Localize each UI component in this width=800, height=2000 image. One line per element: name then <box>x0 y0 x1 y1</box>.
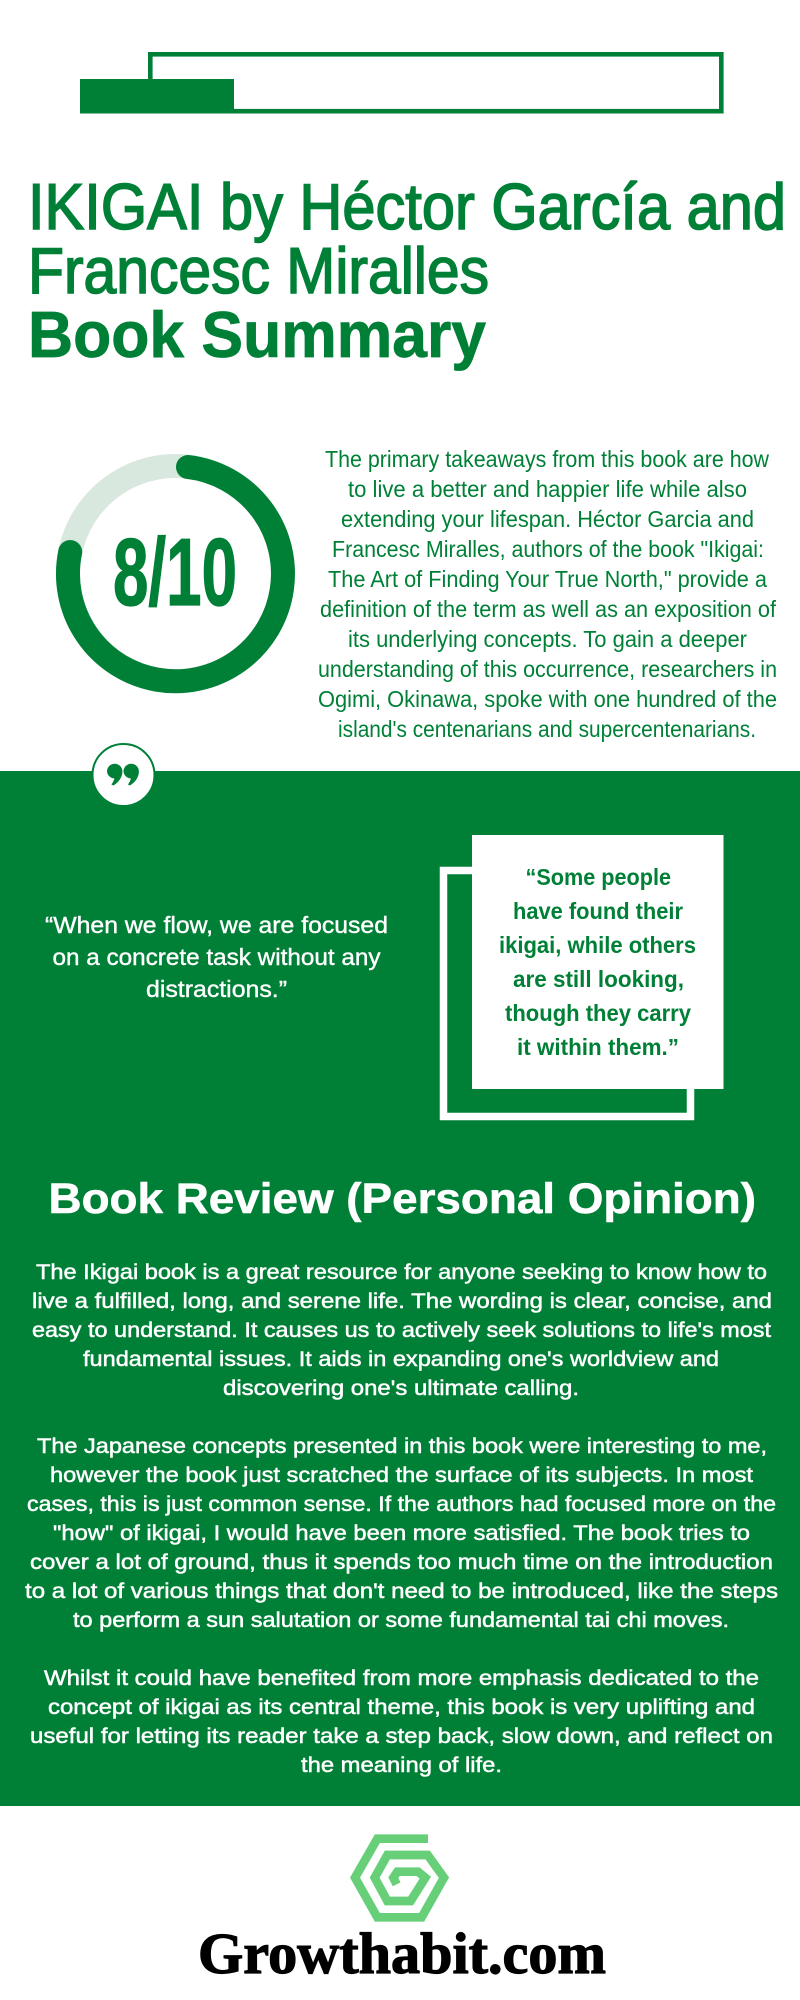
review paragraph 3: useful for letting its reader take a step back, slow down, and reflect on <box>30 1725 773 1748</box>
quote card <box>444 835 724 1116</box>
rating donut: 8/10: 8/10 <box>113 519 237 626</box>
left quote: on a concrete task without any <box>52 944 381 970</box>
review paragraph 2: to perform a sun salutation or some fundamental tai chi moves. <box>73 1609 729 1632</box>
icon: Growthabit hexagon spiral logo <box>355 1839 444 1917</box>
header decoration: outlined frame with solid bar <box>80 54 721 114</box>
review paragraph 1: fundamental issues. It aids in expanding one's worldview and <box>83 1348 719 1371</box>
left quote: “When we flow, we are focused <box>45 912 388 938</box>
intro paragraph: island's centenarians and supercentenarians. <box>338 716 756 742</box>
intro paragraph <box>318 446 777 742</box>
intro paragraph: Francesc Miralles, authors of the book "Ikigai: <box>332 536 764 562</box>
review paragraph 2: cover a lot of ground, thus it spends too much time on the introduction <box>30 1551 773 1574</box>
intro paragraph: extending your lifespan. Héctor Garcia and <box>341 506 754 532</box>
icon: quotation badge <box>92 744 154 806</box>
green background panel <box>0 771 800 1806</box>
intro paragraph: The Art of Finding Your True North," provide a <box>328 566 767 592</box>
review paragraph 1: discovering one's ultimate calling. <box>223 1377 579 1400</box>
review paragraph 2: cases, this is just common sense. If the authors had focused more on the <box>27 1493 776 1516</box>
intro paragraph: Ogimi, Okinawa, spoke with one hundred of the <box>318 686 777 712</box>
title: Francesc Miralles <box>28 234 489 307</box>
rating donut: 8/10 <box>68 466 283 681</box>
intro paragraph: its underlying concepts. To gain a deeper <box>348 626 747 652</box>
intro paragraph: to live a better and happier life while also <box>348 476 747 502</box>
quote card: though they carry <box>505 1000 691 1026</box>
review heading: Book Review (Personal Opinion) <box>48 1175 756 1223</box>
left quote: distractions.” <box>146 976 287 1002</box>
review paragraph 2: however the book just scratched the surface of its subjects. In most <box>50 1464 753 1487</box>
review paragraph 3 <box>30 1667 773 1777</box>
quote card: ikigai, while others <box>499 932 696 958</box>
review paragraph 3: Whilst it could have benefited from more emphasis dedicated to the <box>44 1667 759 1690</box>
intro paragraph: definition of the term as well as an exposition of <box>320 596 777 622</box>
quote card: it within them.” <box>517 1034 679 1060</box>
brand name: Growthabit.com <box>198 1921 606 1986</box>
review paragraph 2: "how" of ikigai, I would have been more satisfied. The book tries to <box>53 1522 750 1545</box>
quote card: “Some people <box>526 864 671 890</box>
left quote <box>45 912 388 1002</box>
review paragraph 2: The Japanese concepts presented in this book were interesting to me, <box>37 1435 767 1458</box>
review paragraph 1: live a fulfilled, long, and serene life. The wording is clear, concise, and <box>32 1290 772 1313</box>
review paragraph 3: the meaning of life. <box>301 1754 502 1777</box>
intro paragraph: understanding of this occurrence, researchers in <box>318 656 777 682</box>
quote card: have found their <box>513 898 683 924</box>
intro paragraph: The primary takeaways from this book are how <box>325 446 769 472</box>
title <box>28 170 786 371</box>
review paragraph 2 <box>25 1435 778 1632</box>
review paragraph 1: The Ikigai book is a great resource for anyone seeking to know how to <box>36 1261 767 1284</box>
review paragraph 1: easy to understand. It causes us to actively seek solutions to life's most <box>32 1319 771 1342</box>
quote card: are still looking, <box>513 966 684 992</box>
review paragraph 2: to a lot of various things that don't need to be introduced, like the steps <box>25 1580 778 1603</box>
title: Book Summary <box>28 298 486 371</box>
review paragraph 1 <box>32 1261 772 1400</box>
review paragraph 3: concept of ikigai as its central theme, this book is very uplifting and <box>48 1696 755 1719</box>
